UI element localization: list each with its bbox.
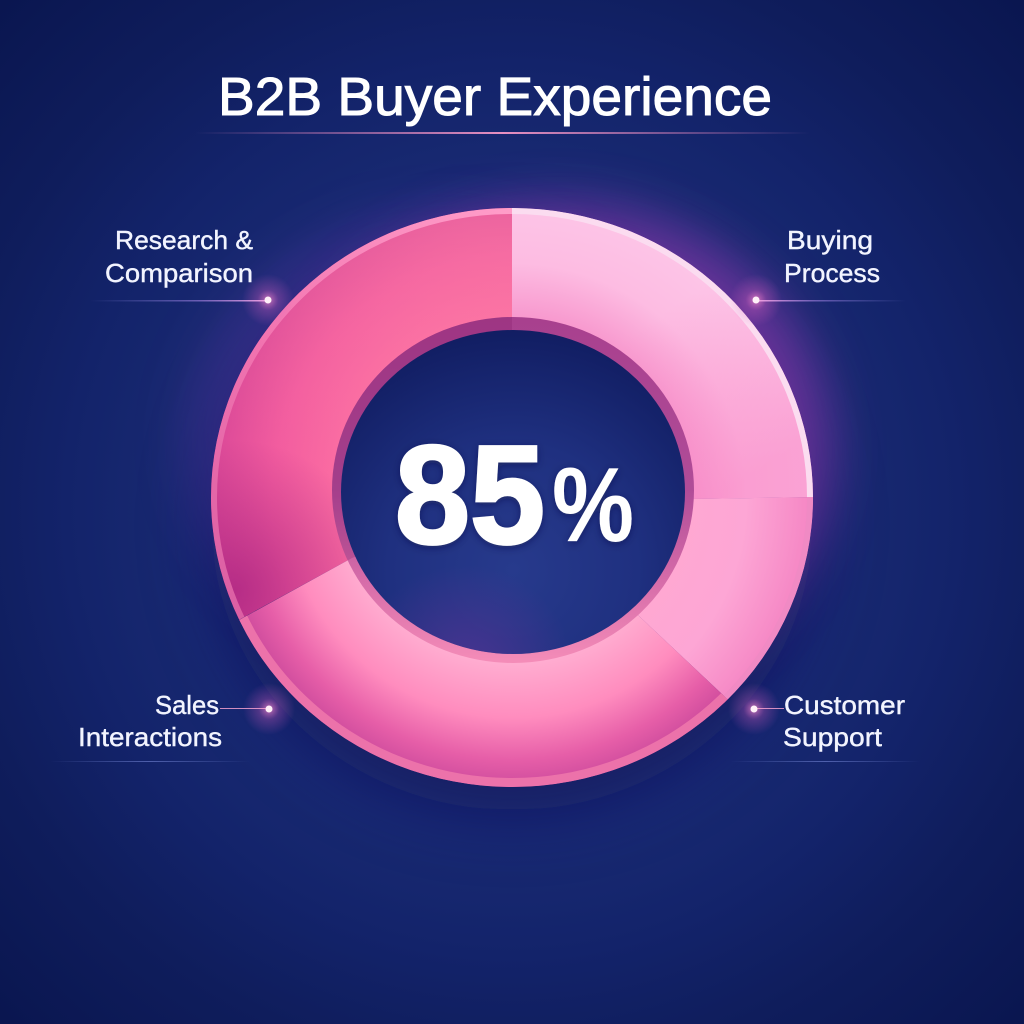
label: customer support [728,683,920,762]
label: customer support: Support [783,722,883,752]
ring glow and shadow [185,205,830,810]
label: sales interactions [50,683,295,762]
label: customer support: Customer [784,690,905,720]
segment: research and comparison [211,208,512,620]
title: B2B Buyer Experience [218,67,772,127]
inner bevel [332,317,694,663]
donut chart [180,176,858,828]
center hole [341,330,685,654]
label: buying process [730,225,906,326]
segment: buying process [512,208,813,499]
label: sales interactions: Interactions [78,722,222,752]
label: research and comparison [90,225,294,326]
center value: 85 [395,416,545,573]
label: research and comparison: Comparison [105,258,253,288]
center value: % [552,446,634,564]
label: buying process: Process [784,258,880,288]
segment: customer support [638,497,813,700]
center value [395,416,634,573]
label: research and comparison: Research & [115,225,253,255]
segment: sales interactions [239,560,728,787]
label: sales interactions: Sales [155,690,219,720]
label: buying process: Buying [787,225,873,255]
